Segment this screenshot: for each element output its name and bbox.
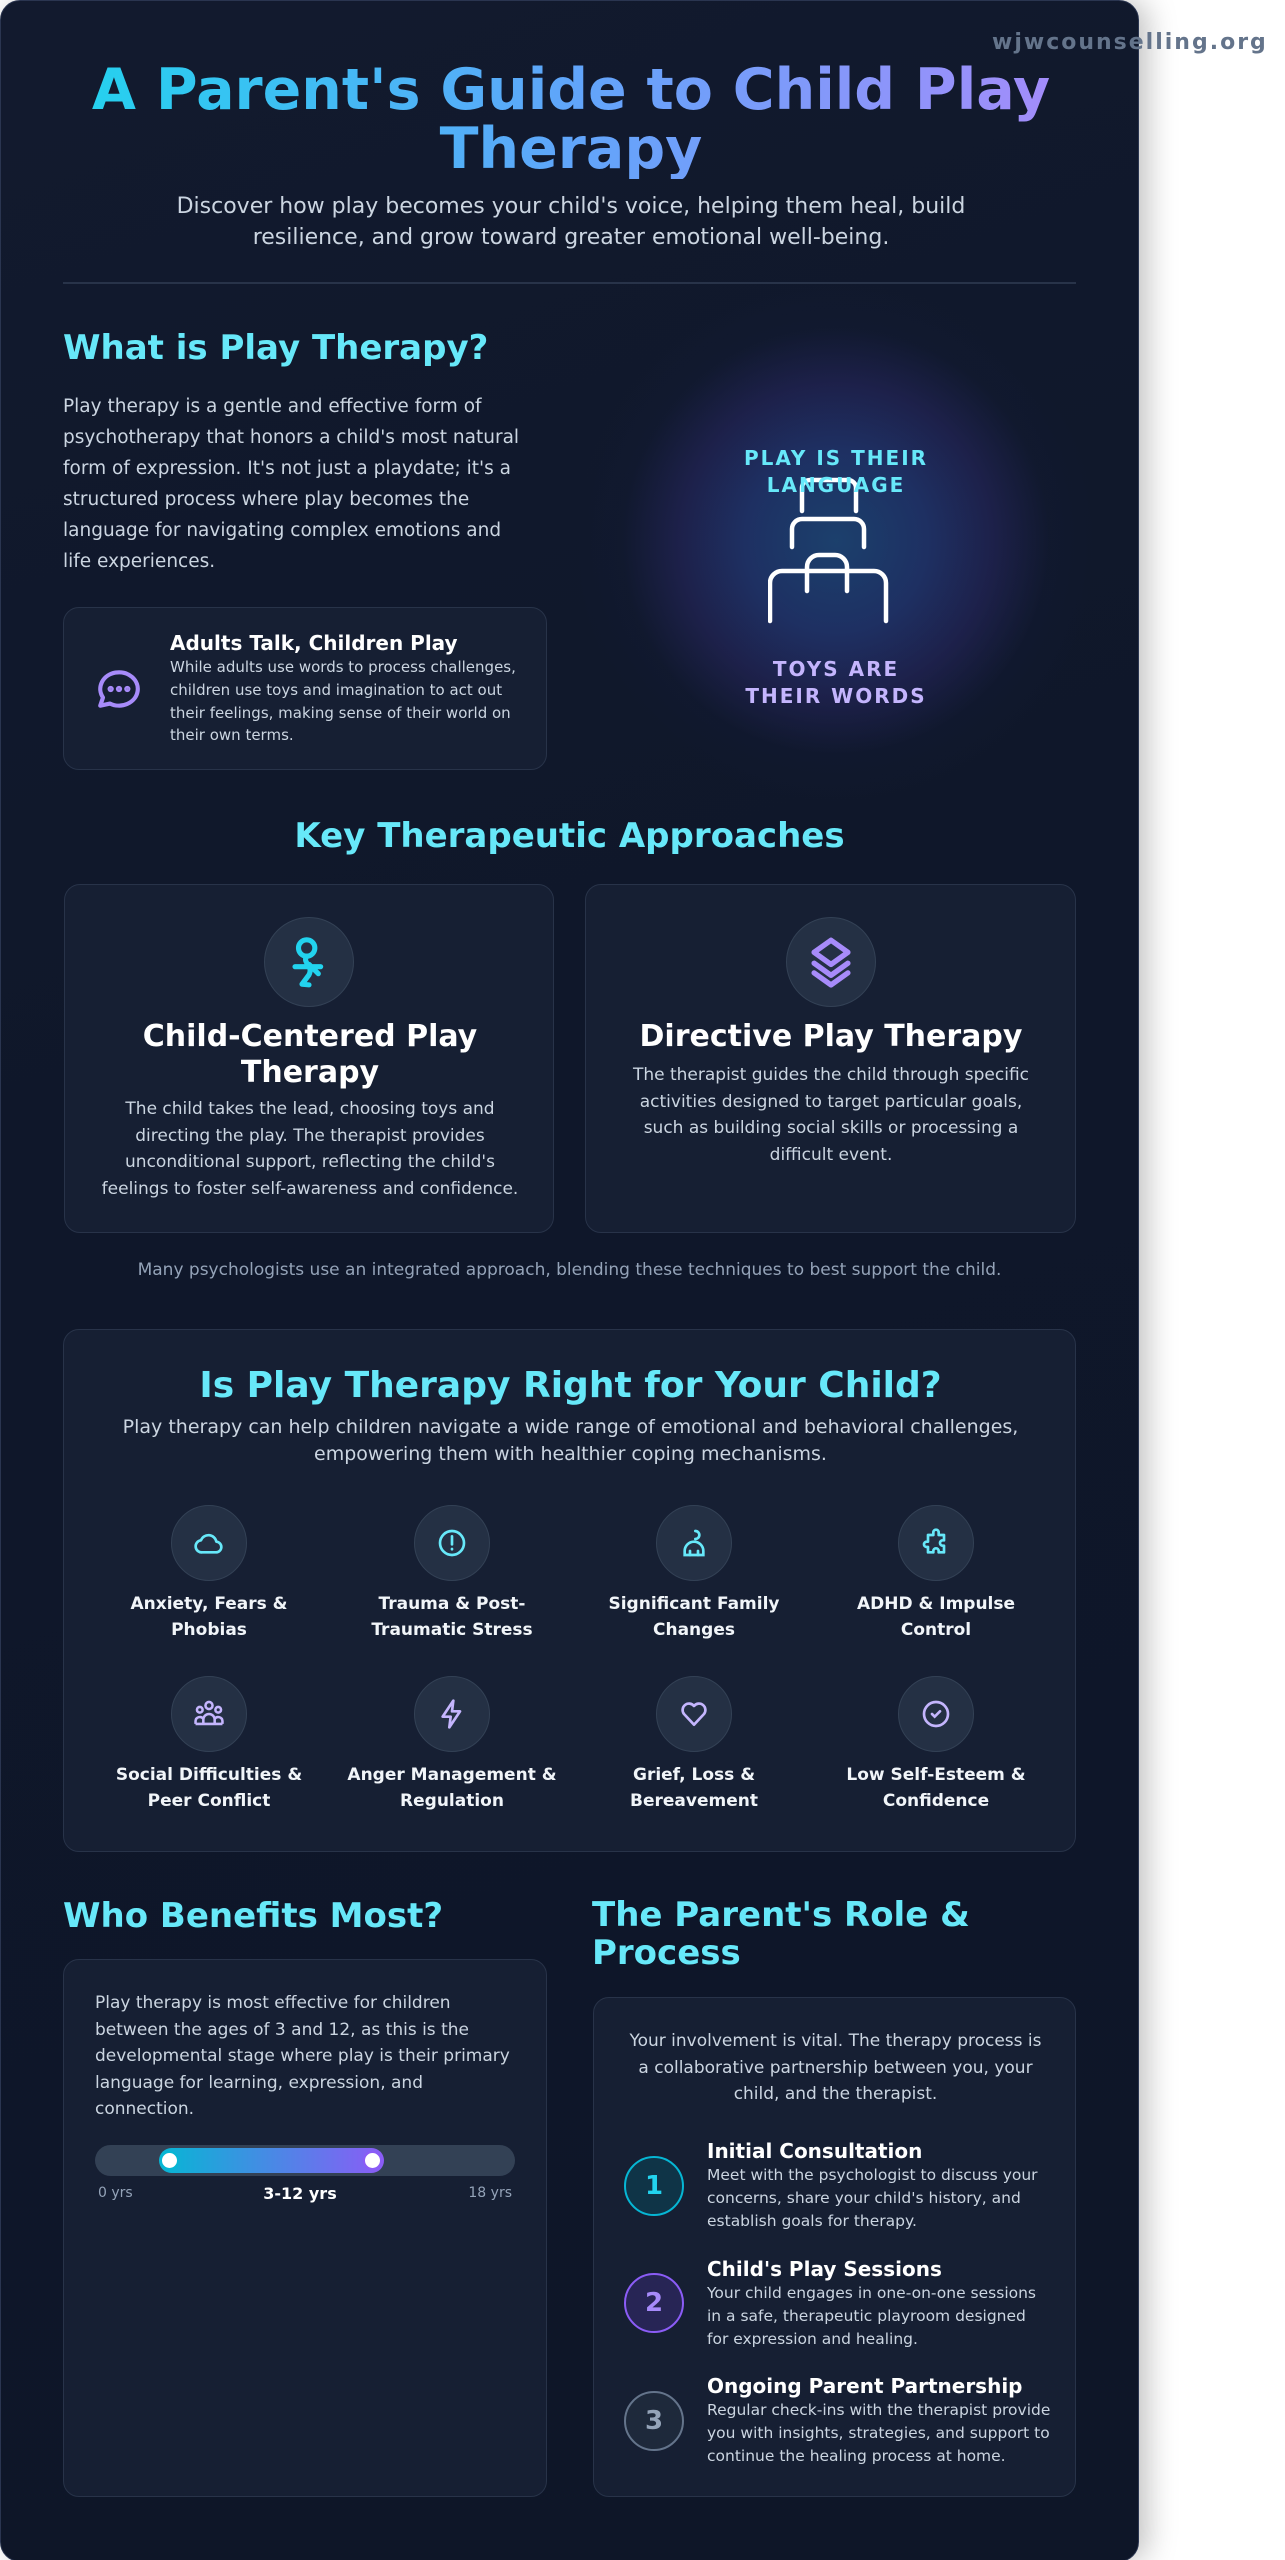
step 2: Child's Play Sessions	[707, 2257, 942, 2281]
panel: is play therapy right	[63, 1329, 1076, 1852]
description: The child takes the lead, choosing toys and directing the play. The therapist provides unconditional support, reflecting the child's feelings to foster self-awareness and confidence.	[102, 1099, 518, 1198]
item: anger	[347, 1676, 557, 1811]
age range bar: 0 yrs	[98, 2185, 133, 2201]
step 3	[624, 2374, 1050, 2465]
title: Therapy	[241, 1055, 379, 1090]
item: anxiety	[130, 1505, 288, 1640]
heading: Is Play Therapy Right for Your Child?	[199, 1365, 942, 1406]
text: toys are their words: TOYS ARE	[773, 657, 899, 681]
step 1: 1	[645, 2171, 663, 2201]
subtitle: Discover how play becomes your child's voice, helping them heal, build resilience, and grow toward greater emotional well-being.	[177, 194, 965, 250]
title	[143, 1019, 477, 1090]
item: social: Social Difficulties & Peer Conflict	[116, 1765, 302, 1811]
item: family	[608, 1505, 780, 1640]
intro text: Your involvement is vital. The therapy process is a collaborative partnership between you, your child, and the therapist.	[629, 2031, 1042, 2104]
text: play is their language: LANGUAGE	[767, 473, 905, 497]
text: play is their language	[744, 446, 928, 497]
watermark: wjwcounselling.org	[992, 30, 1268, 55]
step 3: Ongoing Parent Partnership	[707, 2374, 1022, 2398]
step 1: Initial Consultation	[707, 2139, 922, 2163]
card: directive	[585, 884, 1076, 1233]
text: play is their language: PLAY IS THEIR	[744, 446, 928, 470]
step 1	[624, 2139, 1038, 2230]
heading: who benefits: Who Benefits Most?	[63, 1896, 443, 1936]
item: self-esteem: Low Self-Esteem & Confidence	[846, 1765, 1026, 1811]
heading: parent's role: The Parent's Role &	[592, 1895, 970, 1935]
step 1: Meet with the psychologist to discuss your concerns, share your child's history, and establish goals for therapy.	[707, 2166, 1038, 2230]
title: Therapy	[440, 116, 702, 182]
item: social	[116, 1676, 302, 1811]
note: Many psychologists use an integrated approach, blending these techniques to best support the child.	[138, 1260, 1001, 1280]
step 2: 2	[645, 2288, 663, 2318]
step 2	[624, 2257, 1036, 2348]
item: anger: Anger Management & Regulation	[347, 1765, 557, 1811]
panel: who benefits	[63, 1959, 547, 2497]
text: Play therapy is most effective for children between the ages of 3 and 12, as this is the developmental stage where play is their primary language for learning, expression, and connection.	[95, 1993, 510, 2119]
item: trauma	[371, 1505, 533, 1640]
title	[61, 61, 1081, 179]
subtext: Play therapy can help children navigate a wide range of emotional and behavioral challenges, empowering them with healthier coping mechanisms.	[123, 1416, 1018, 1465]
heading: what is play therapy: What is Play Therapy?	[63, 328, 488, 368]
item: trauma: Trauma & Post-Traumatic Stress	[371, 1594, 533, 1640]
icon: layers	[786, 917, 876, 1007]
item: grief	[630, 1676, 758, 1811]
item: family: Significant Family Changes	[608, 1594, 780, 1640]
icon: chat bubble	[98, 670, 140, 708]
step 2: Your child engages in one-on-one sessions in a safe, therapeutic playroom designed for expression and healing.	[707, 2284, 1036, 2348]
callout text: While adults use words to process challenges, children use toys and imagination to act out their feelings, making sense of their world on their own terms.	[170, 658, 516, 744]
callout: adults talk	[63, 607, 547, 770]
age range bar	[95, 2145, 515, 2203]
item: grief: Grief, Loss & Bereavement	[630, 1765, 758, 1811]
age range bar: 3-12 yrs	[263, 2184, 337, 2203]
step 3: Regular check-ins with the therapist provide you with insights, strategies, and support to continue the healing process at home.	[707, 2401, 1050, 2465]
age range bar: 18 yrs	[468, 2185, 512, 2201]
item: adhd	[857, 1505, 1015, 1640]
callout text: Adults Talk, Children Play	[170, 631, 458, 655]
body text: Play therapy is a gentle and effective form of psychotherapy that honors a child's most natural form of expression. It's not just a playdate; it's a structured process where play becomes the language for navigating complex emotions and life experiences.	[63, 396, 519, 572]
description: The therapist guides the child through specific activities designed to target particular goals, such as building social skills or processing a difficult event.	[633, 1065, 1029, 1164]
item: adhd: ADHD & Impulse Control	[857, 1594, 1015, 1640]
heading: parent's role	[592, 1895, 970, 1973]
title: A Parent's Guide to Child Play	[92, 57, 1050, 123]
graphic: play is their language	[633, 338, 1039, 744]
item: anxiety: Anxiety, Fears & Phobias	[130, 1594, 288, 1640]
heading: key approaches: Key Therapeutic Approaches	[294, 816, 845, 856]
item: self-esteem	[846, 1676, 1026, 1811]
icon: child	[264, 917, 354, 1007]
panel: parent's role	[593, 1997, 1076, 2497]
card: child-centered	[64, 884, 554, 1233]
text: toys are their words	[745, 657, 927, 708]
step 3: 3	[645, 2406, 663, 2436]
icon: toy stack	[768, 478, 888, 624]
title: Directive Play Therapy	[640, 1019, 1022, 1054]
heading: parent's role: Process	[592, 1933, 741, 1973]
text: toys are their words: THEIR WORDS	[745, 684, 927, 708]
title: Child-Centered Play	[143, 1019, 477, 1054]
